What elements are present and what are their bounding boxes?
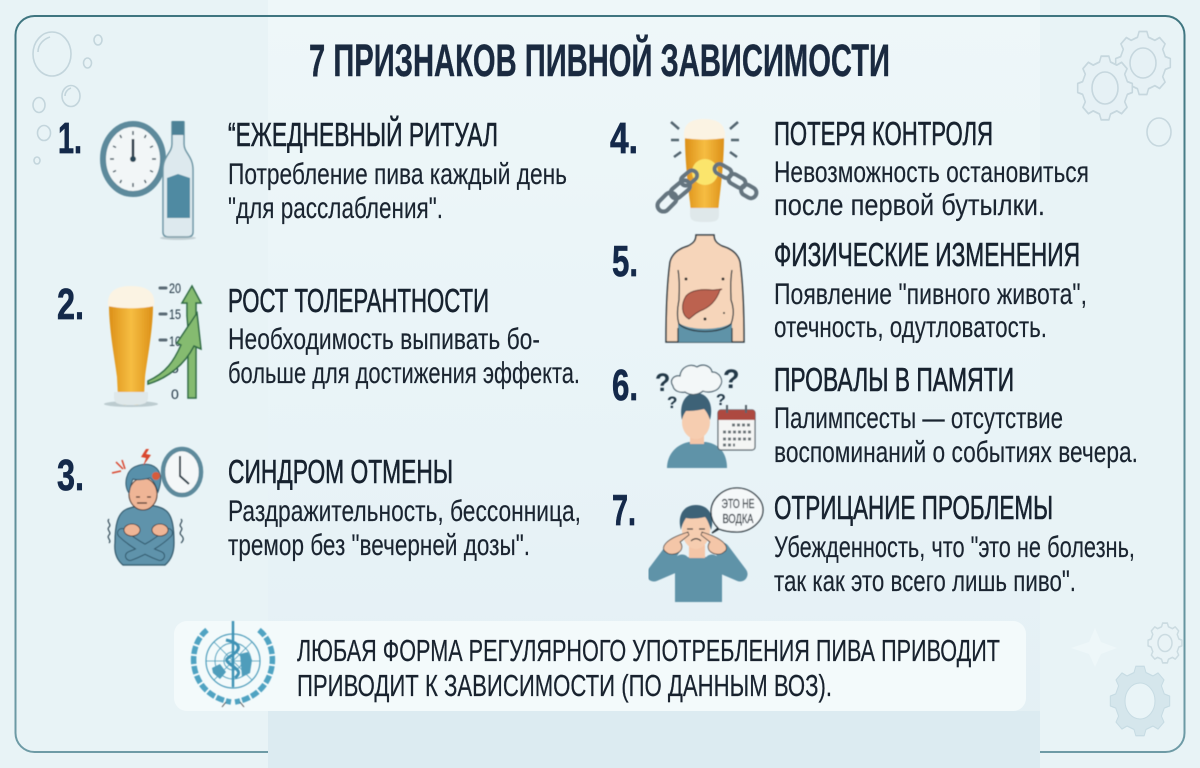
callout text (297, 633, 1000, 703)
bubbles decoration (33, 32, 102, 164)
number 3: 3. (57, 451, 84, 500)
icon: man with cloud and calendar: ? (716, 392, 726, 409)
bottom callout (174, 621, 1026, 711)
text 3: тремор без "вечерней дозы". (228, 529, 530, 562)
icon: man covering ears with speech bubble: ВОДКА (722, 511, 754, 526)
icon: man covering ears with speech bubble (654, 488, 763, 602)
text 1: Потребление пива каждый день (228, 158, 567, 191)
text 2: больше для достижения эффекта. (228, 357, 580, 390)
text 1 (228, 158, 567, 225)
number 5: 5. (612, 237, 638, 286)
sign 6: memory lapses (612, 361, 1138, 469)
icon: beer with rising arrows: 10 (169, 333, 181, 349)
sign 1: daily ritual (58, 114, 567, 240)
text 3 (228, 495, 581, 562)
number 6: 6. (612, 361, 638, 410)
number 4: 4. (610, 114, 638, 163)
icon: beer with rising arrows: 15 (169, 306, 181, 322)
text 7: так как это всего лишь пиво". (774, 565, 1076, 598)
sign 7: denial (612, 486, 1135, 602)
text 2: Необходимость выпивать бо- (228, 323, 540, 356)
title: 7 ПРИЗНАКОВ ПИВНОЙ ЗАВИСИМОСТИ (309, 35, 890, 86)
icon: WHO emblem (194, 621, 272, 707)
icon: beer with rising arrows: 0 (171, 386, 179, 402)
text 3: Раздражительность, бессонница, (228, 495, 581, 528)
icon: shivering man with clock (108, 449, 201, 565)
heading 2: РОСТ ТОЛЕРАНТНОСТИ (228, 282, 489, 319)
sign 5: physical changes (612, 235, 1087, 344)
text 6 (774, 402, 1138, 469)
heading 6: ПРОВАЛЫ В ПАМЯТИ (774, 361, 1014, 398)
callout text: ПРИВОДИТ К ЗАВИСИМОСТИ (ПО ДАННЫМ ВОЗ). (297, 668, 832, 703)
sign 2: tolerance (57, 280, 580, 407)
heading 1: “ЕЖЕДНЕВНЫЙ РИТУАЛ (228, 116, 498, 153)
text 4 (774, 156, 1089, 222)
sign 3: withdrawal (57, 449, 581, 565)
icon: man with cloud and calendar: ? (655, 369, 670, 397)
text 6: Палимпсесты — отсутствие (774, 402, 1063, 435)
number 1: 1. (58, 114, 82, 163)
text 1: "для расслабления". (228, 192, 443, 225)
text 2 (228, 323, 580, 390)
sign 4: loss of control (610, 114, 1089, 222)
heading 7: ОТРИЦАНИЕ ПРОБЛЕМЫ (774, 489, 1053, 526)
icon: man with cloud and calendar: ? (723, 364, 740, 394)
icon: clock and bottle (103, 121, 196, 240)
text 5: отечность, одутловатость. (774, 311, 1047, 344)
heading 4: ПОТЕРЯ КОНТРОЛЯ (774, 115, 993, 152)
gears bottom right decoration (1071, 623, 1182, 736)
callout background (174, 621, 1026, 711)
text 4: после первой бутылки. (774, 189, 1045, 222)
icon: beer with rising arrows: 20 (169, 280, 181, 296)
icon: man with cloud and calendar: ? (667, 393, 677, 412)
icon: beer with rising arrows: 5 (171, 360, 179, 376)
gears top right decoration (1078, 32, 1171, 146)
icon: beer with broken chain (655, 119, 758, 222)
number 2: 2. (57, 280, 84, 329)
text 7 (774, 531, 1135, 598)
icon: beer with rising arrows (104, 280, 201, 407)
icon: man with cloud and calendar (655, 364, 755, 468)
heading 3: СИНДРОМ ОТМЕНЫ (228, 453, 453, 490)
text 5: Появление "пивного живота", (774, 278, 1087, 311)
icon: man covering ears with speech bubble: ЭТО НЕ (722, 496, 755, 511)
text 4: Невозможность остановиться (774, 156, 1089, 189)
bottom band patch (268, 711, 1040, 768)
text 5 (774, 278, 1087, 344)
icon: torso with liver (666, 235, 744, 342)
number 7: 7. (612, 486, 636, 535)
